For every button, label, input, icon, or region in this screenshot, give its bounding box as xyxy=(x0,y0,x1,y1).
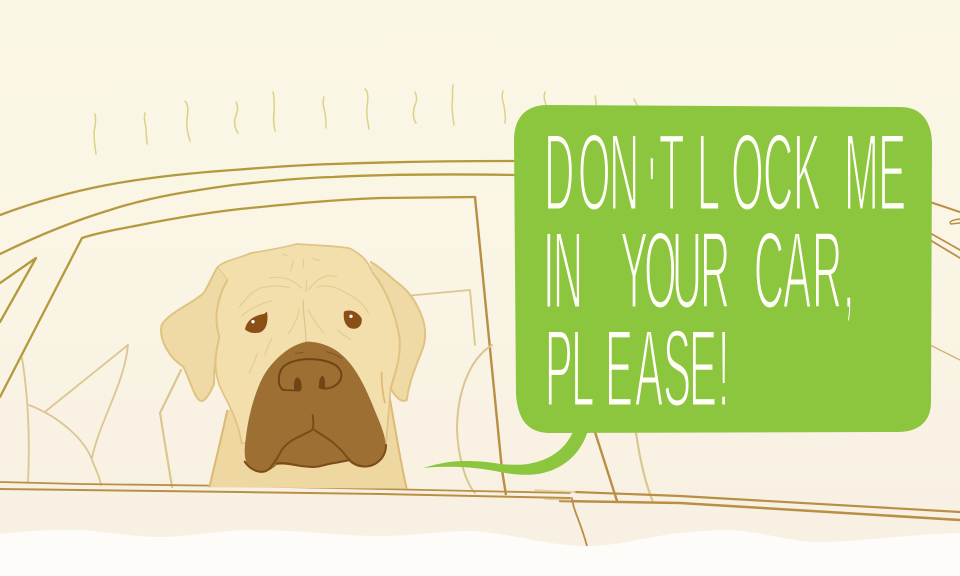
front door lines xyxy=(0,202,960,546)
dog body xyxy=(209,372,407,489)
dog xyxy=(161,244,425,489)
dog neck crease xyxy=(382,372,385,403)
dog wrinkles xyxy=(239,254,368,373)
dog right ear xyxy=(370,262,425,401)
car body lines xyxy=(0,161,516,397)
rear seat lines xyxy=(22,290,653,502)
bubble tail xyxy=(423,430,588,475)
dog mouth xyxy=(245,415,386,472)
speech bubble xyxy=(423,105,932,475)
window post xyxy=(475,197,506,495)
line 2: IN YOUR CAR, xyxy=(543,209,854,332)
dog left ear xyxy=(161,267,227,401)
line 1: DON'T LOCK ME xyxy=(544,111,906,256)
dog head xyxy=(216,244,400,443)
line 3: PLEASE! xyxy=(545,307,729,430)
dog eyes xyxy=(245,310,362,333)
dog nose xyxy=(279,352,342,391)
bubble body xyxy=(514,105,932,433)
ground xyxy=(0,530,960,576)
heat waves xyxy=(94,85,637,154)
dog muzzle xyxy=(245,342,386,472)
bubble text xyxy=(543,111,906,430)
